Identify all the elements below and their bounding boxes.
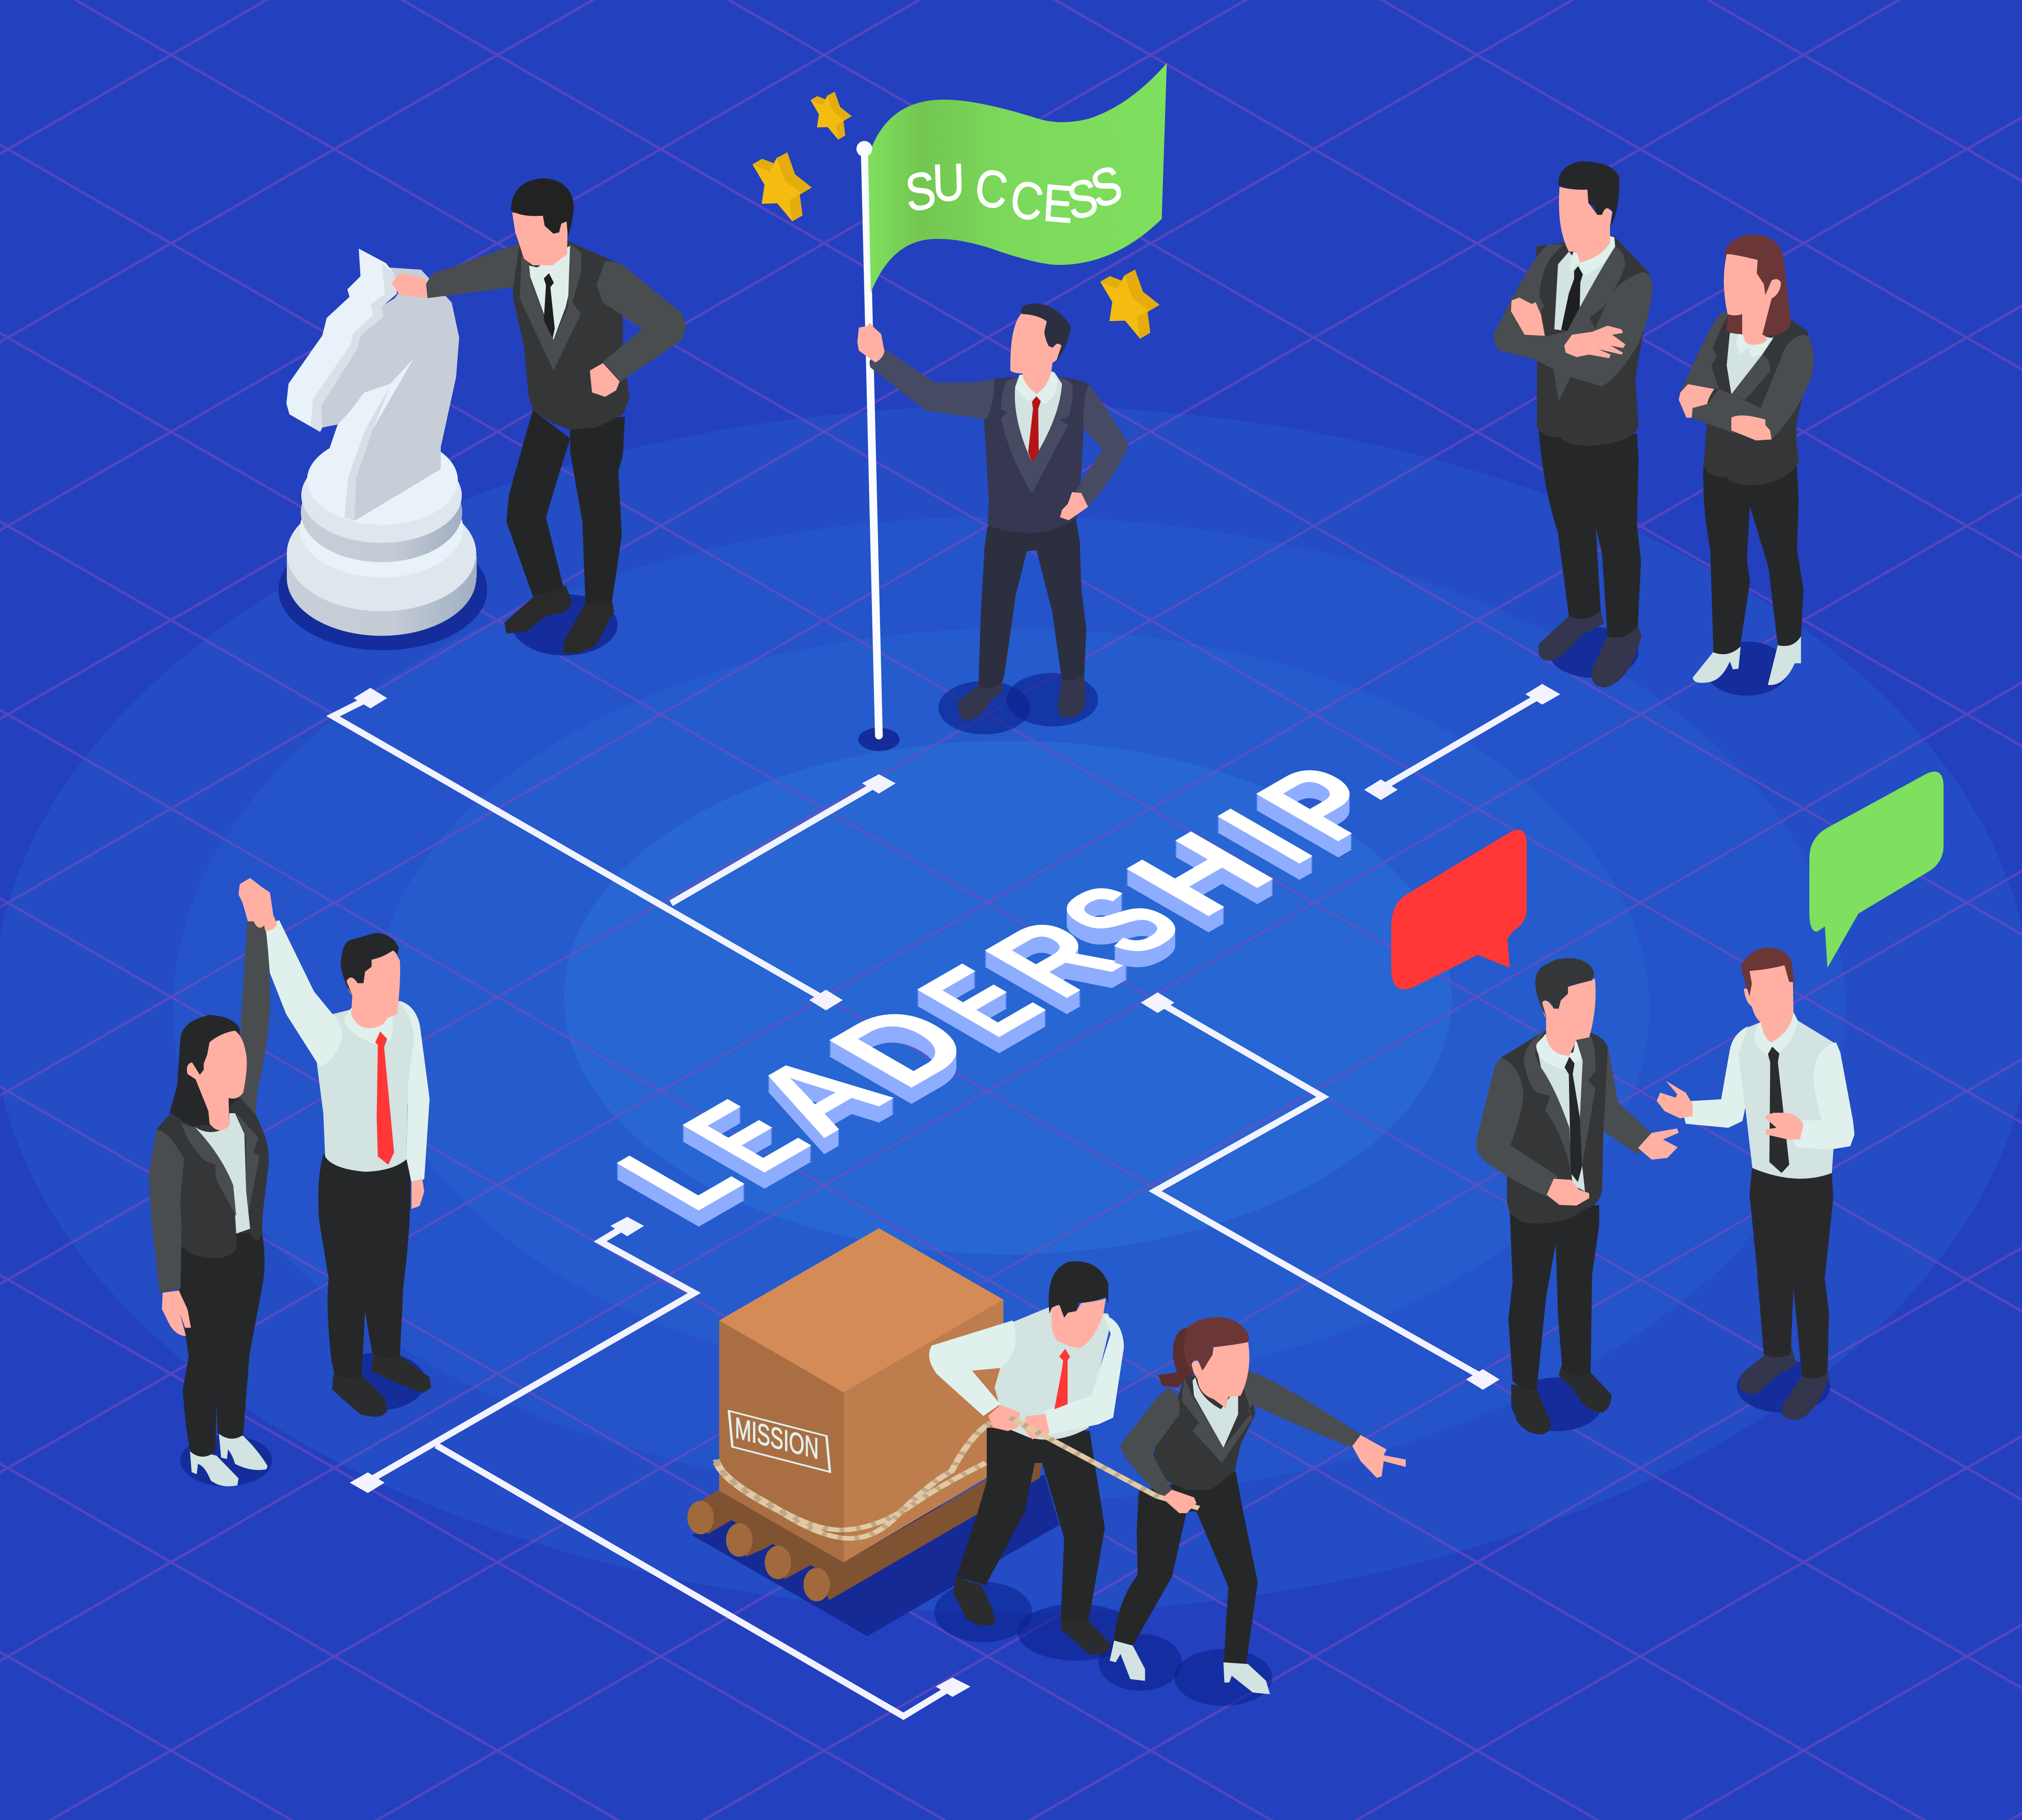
knight shadow: [279, 529, 487, 650]
crate: [719, 1228, 1003, 1562]
title: LEADERSHIP: D: [796, 985, 1007, 1107]
title: LEADERSHIP: L: [585, 1120, 773, 1229]
man in shirt talking: [1657, 947, 1855, 1420]
woman pulling the rope and pointing: [1010, 1317, 1406, 1694]
title: LEADERSHIP: R: [953, 900, 1155, 1017]
gold star left: [753, 152, 812, 222]
mission label text: MISSION: [735, 1410, 819, 1465]
woman with raised arm: [149, 878, 277, 1486]
green speech bubble: [1809, 772, 1944, 968]
chess knight and businessman: [279, 178, 686, 655]
log rollers: [687, 1454, 1042, 1601]
title: LEADERSHIP: E: [651, 1081, 840, 1190]
label outline: [729, 1411, 830, 1472]
title: LEADERSHIP: E: [886, 946, 1075, 1055]
red speech bubble: [1391, 830, 1527, 989]
flag cloth and label: SUCCESS: [903, 153, 1127, 234]
title: LEADERSHIP: I: [1185, 790, 1345, 882]
businessman holding flag: [857, 304, 1129, 734]
standing man with folded arms: [1493, 161, 1652, 687]
title: LEADERSHIP: A: [714, 1034, 922, 1154]
title: LEADERSHIP: S: [1025, 865, 1216, 974]
gold star right: [1100, 270, 1160, 339]
flowchart connectors: [333, 684, 1560, 1716]
rope around crate: [716, 1423, 991, 1539]
flag cloth and label: [857, 63, 1167, 293]
man with raised arm: [265, 920, 431, 1417]
gold star top: [810, 92, 852, 140]
success flag: [857, 63, 1167, 736]
chess knight: [286, 249, 477, 636]
businessman leaning on knight: [391, 178, 686, 655]
flag pole: [865, 148, 879, 736]
title: LEADERSHIP: P: [1224, 746, 1421, 860]
man in jacket talking: [1476, 958, 1679, 1435]
title: LEADERSHIP: H: [1093, 812, 1306, 935]
standing woman with folded arms: [1679, 235, 1814, 696]
man pulling the rope: [929, 1261, 1124, 1655]
foot shadows of pulling pair: [934, 1582, 1272, 1706]
pull rope: [1010, 1418, 1199, 1508]
mission crate being pulled: [687, 1228, 1059, 1636]
crate shadow: [692, 1475, 1059, 1636]
title: LEADERSHIP: [599, 687, 1523, 1221]
pole base shadow: [858, 728, 899, 751]
